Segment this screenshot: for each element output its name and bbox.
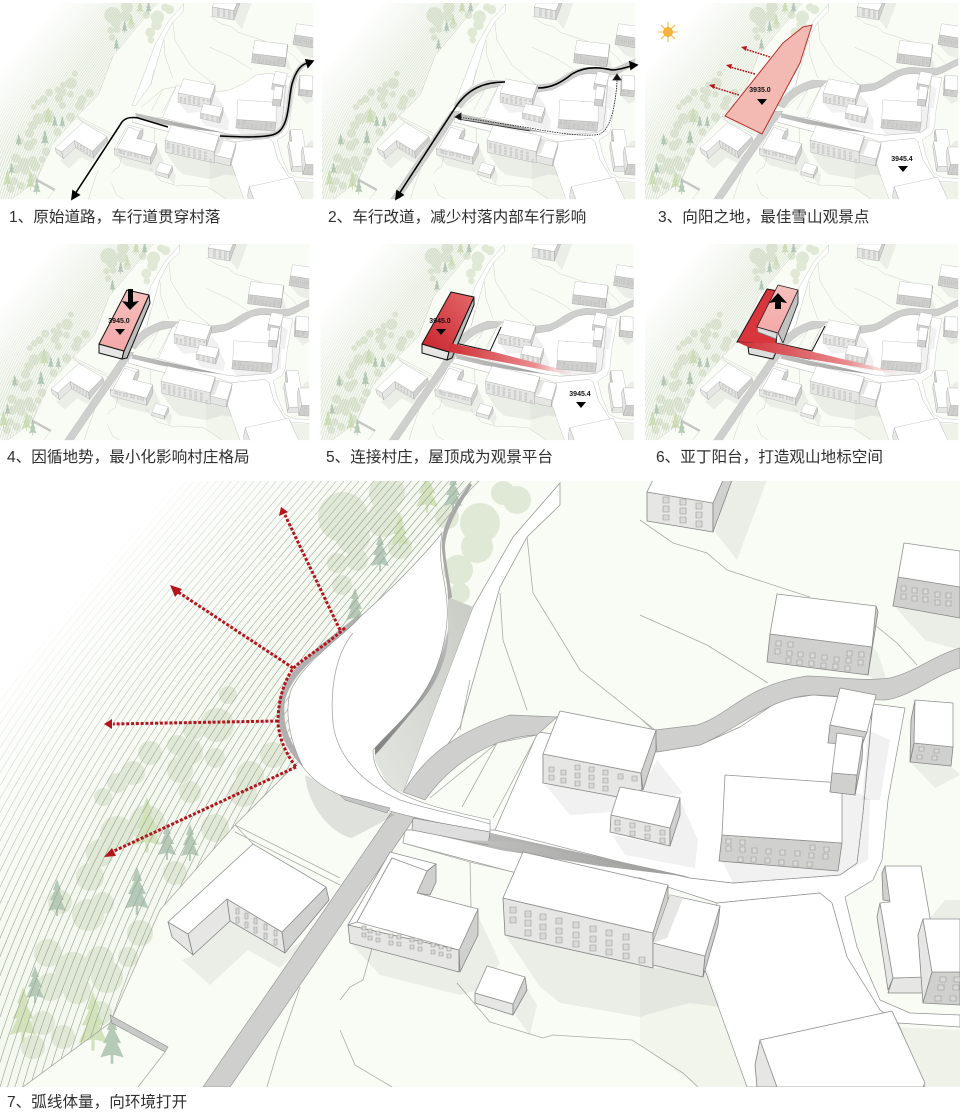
new road arrow bbox=[396, 62, 637, 199]
site base map bbox=[0, 0, 315, 206]
site base map with road bbox=[645, 3, 958, 200]
elevation mark 3935.0: 3935.0 bbox=[749, 87, 771, 94]
panel 2: road re-routing bbox=[322, 3, 639, 200]
icon: sun bbox=[658, 22, 678, 42]
elevation mark 3945.0: 3945.0 bbox=[108, 318, 130, 325]
elevation mark 3935.0 bbox=[749, 87, 771, 105]
caption 2: 2、车行改道，减少村落内部车行影响 bbox=[328, 208, 586, 226]
site base map with road bbox=[645, 244, 958, 440]
old road dashed arrow bbox=[455, 74, 621, 135]
pink site polygon bbox=[725, 25, 812, 134]
caption 4: 4、因循地势，最小化影响村庄格局 bbox=[7, 448, 250, 466]
elevation mark 3945.0 bbox=[108, 318, 130, 335]
gray roads bbox=[203, 648, 960, 1087]
site base: terrain, trees, contours, plazas bbox=[0, 462, 960, 1100]
caption 7: 7、弧线体量，向环境打开 bbox=[7, 1092, 187, 1111]
elevation mark 3945.4 bbox=[891, 156, 913, 172]
black up arrow bbox=[769, 293, 787, 309]
site base map with new road bbox=[322, 3, 636, 200]
red massing block bbox=[422, 292, 474, 360]
plot outline bbox=[455, 327, 501, 351]
elevation mark 3945.0 bbox=[429, 318, 451, 335]
panel 4: follow terrain bbox=[0, 238, 311, 447]
black road arrow bbox=[72, 60, 313, 199]
caption 6: 6、亚丁阳台，打造观山地标空间 bbox=[656, 448, 883, 466]
red gradient bridge bbox=[737, 342, 897, 373]
panel: large axonometric view, step 7 bbox=[0, 462, 960, 1100]
caption 5: 5、连接村庄，屋顶成为观景平台 bbox=[326, 448, 553, 466]
red gradient bridge bbox=[449, 343, 571, 375]
site base map with road bbox=[320, 244, 634, 440]
red sightline arrows bbox=[709, 46, 770, 95]
site base map with road bbox=[0, 238, 311, 447]
panel 1: original road bbox=[0, 0, 315, 206]
building shadows bbox=[182, 480, 960, 1035]
arc-shaped main volume bbox=[278, 483, 616, 868]
upper pink block bbox=[757, 285, 798, 343]
caption 1: 1、原始道路，车行道贯穿村落 bbox=[9, 208, 221, 226]
red terrace plate bbox=[737, 289, 778, 344]
elevation mark 3945.4: 3945.4 bbox=[891, 156, 913, 163]
red dotted view arrows bbox=[104, 507, 345, 857]
panel 6: terrace landmark bbox=[645, 244, 958, 440]
black down arrow bbox=[122, 289, 139, 310]
panel 3: sunny site bbox=[645, 3, 958, 200]
pink massing block bbox=[99, 290, 150, 359]
elevation mark 3945.4: 3945.4 bbox=[569, 391, 591, 398]
panel 5: connect village, roof platform bbox=[320, 244, 634, 440]
caption 3: 3、向阳之地，最佳雪山观景点 bbox=[658, 208, 869, 226]
lower wall bbox=[748, 347, 776, 359]
elevation mark 3945.0: 3945.0 bbox=[429, 318, 451, 325]
elevation mark 3945.4 bbox=[569, 391, 591, 408]
village buildings bbox=[168, 480, 960, 1087]
plot outline bbox=[776, 326, 825, 359]
